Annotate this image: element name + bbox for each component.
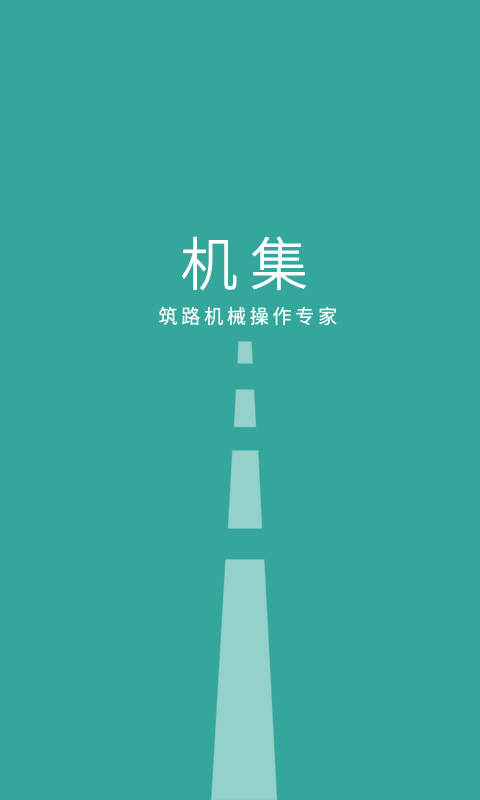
- road dash 3: [228, 450, 262, 528]
- subtitle: 筑路机械操作专家: [158, 306, 341, 328]
- road dash 2: [234, 390, 256, 427]
- road dash 4: [211, 560, 277, 800]
- title: 机集: [180, 234, 320, 298]
- road dash 1: [238, 342, 253, 364]
- road markings: [211, 342, 277, 800]
